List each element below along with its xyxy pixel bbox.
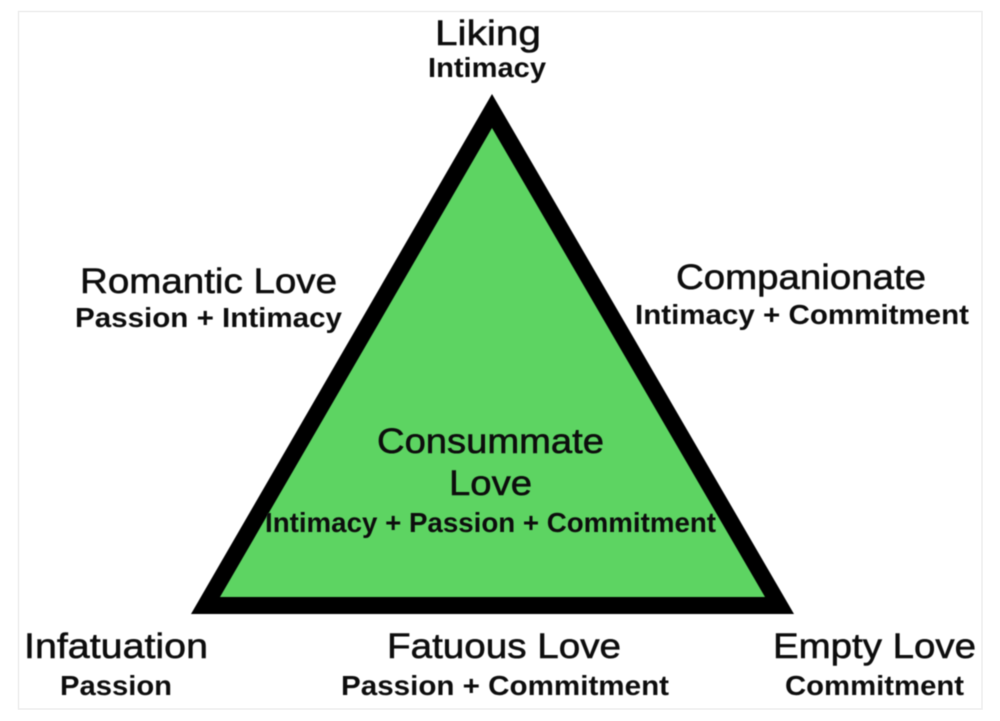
label: Infatuation (24, 627, 208, 701)
triangle fill (220, 128, 765, 597)
label: Romantic Love: Passion + Intimacy (75, 302, 343, 333)
label: Liking: Liking (435, 14, 541, 53)
triangle outline (191, 94, 794, 614)
label: Fatuous Love (341, 627, 669, 701)
label: Empty Love: Empty Love (773, 627, 976, 666)
triangle: love diagram (191, 94, 794, 614)
label: Companionate: Companionate (676, 258, 926, 297)
label: Companionate (635, 258, 969, 330)
label: Liking: Intimacy (428, 52, 547, 83)
label: Consummate Love: Love (449, 464, 532, 503)
label: Romantic Love: Romantic Love (80, 262, 337, 301)
label: Liking (428, 14, 547, 83)
label: Fatuous Love: Fatuous Love (387, 627, 621, 666)
label: Empty Love: Commitment (785, 670, 964, 701)
label: Infatuation: Infatuation (24, 627, 208, 666)
label: Consummate Love: Intimacy + Passion + Commitment (265, 507, 716, 538)
label: Companionate: Intimacy + Commitment (635, 299, 969, 330)
label: Consummate Love: Consummate (377, 422, 604, 461)
label: Romantic Love (75, 262, 343, 333)
label: Infatuation: Passion (60, 670, 172, 701)
label: Fatuous Love: Passion + Commitment (341, 670, 669, 701)
label: Empty Love (773, 627, 976, 701)
label: Consummate Love (265, 422, 716, 538)
